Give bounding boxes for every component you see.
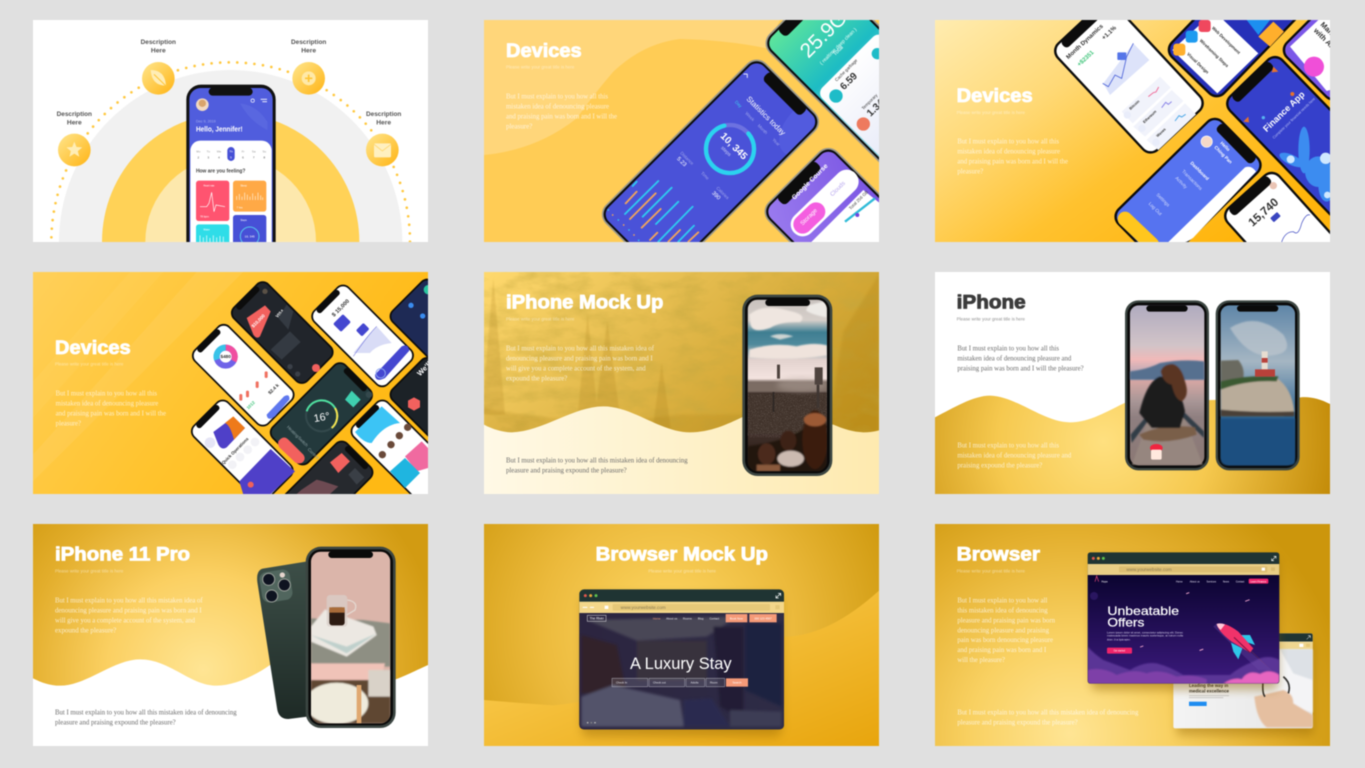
heading: Browser Mock Up <box>596 545 768 566</box>
body text: But I must explain to you how all this mistaken idea of <box>55 596 203 604</box>
phone: google course: Storage <box>800 208 819 227</box>
phone: Hello Jennifer app: 8 <box>263 155 265 159</box>
body text: mistaken idea of denouncing pleasure <box>957 148 1060 156</box>
phone: Hello Jennifer app: 78 bpm <box>200 215 210 219</box>
heading: Devices <box>506 41 582 62</box>
browser window: hotel: Home <box>653 616 661 620</box>
body text: But I must explain to you how all <box>957 597 1047 605</box>
browser window: medical: Leading the way in <box>1189 683 1228 688</box>
body text: pleasure? <box>957 168 983 176</box>
phone: Hello Jennifer app: 4 <box>218 155 220 159</box>
phone: task list: Visual Design <box>1186 51 1210 75</box>
phone: statistics today: 5.23 <box>675 156 687 168</box>
body text: mistaken idea of denouncing pleasure <box>506 102 609 110</box>
heading: Devices <box>957 86 1033 107</box>
subtitle: Please write your great title is here <box>55 569 124 574</box>
lower body text: But I must explain to you how all this <box>957 441 1059 449</box>
phone: 15,740 chart: 15,740 <box>1246 196 1281 229</box>
phone: Hello Jennifer app: Heart rate <box>203 184 215 187</box>
phone: dark map <box>267 437 377 547</box>
phone: Hello Jennifer app: Hello, Jennifer! <box>196 127 243 134</box>
phone: profile menu: Activity <box>1174 176 1189 190</box>
subtitle: Please write your great title is here <box>506 317 575 322</box>
heading: iPhone 11 Pro <box>55 545 190 566</box>
phone: statistics today: steps <box>719 145 732 158</box>
panel: devices dark and light app grid <box>32 271 429 495</box>
lower body text: But I must explain to you how all this mistaken idea of denouncing <box>957 708 1139 716</box>
panel: iPhone two photos <box>934 272 1331 495</box>
background blob <box>484 20 780 155</box>
phone: Hello Jennifer app: Steps <box>240 219 247 222</box>
browser window: unbeatable offers: Offers <box>1107 616 1144 630</box>
browser window: unbeatable offers: malesuada lorem maximus mauris scelerisque, at rutrum nulla <box>1107 635 1184 638</box>
body text <box>56 390 166 428</box>
browser window: unbeatable offers: www.yourwebsite.com <box>1126 567 1172 572</box>
heading: Browser <box>957 545 1041 566</box>
phone: Hello Jennifer app: Sleep <box>240 184 247 187</box>
browser window: hotel <box>579 589 784 737</box>
phone: donut chart: $2.4 k <box>267 382 280 395</box>
phone: Hello Jennifer app: 7 <box>253 155 255 159</box>
browser window: unbeatable offers: Unbeatable <box>1107 604 1179 618</box>
phone: Hello Jennifer app <box>186 85 276 258</box>
browser window: hotel: Adults <box>691 681 699 685</box>
labels: description: Here <box>67 119 82 126</box>
phone: google course: Total 256 GB <box>848 189 869 211</box>
phone: storage 25.9GB: 6.59 <box>838 71 860 92</box>
hotel room photo <box>579 613 784 729</box>
body text: But I must explain to you how all this <box>506 92 608 100</box>
dotted arc <box>51 62 410 421</box>
panel: phone with description icons <box>32 20 428 243</box>
subtitle: Please write your great title is here <box>648 569 716 574</box>
phone: profile menu: Transactions <box>1181 169 1204 192</box>
phone: google course <box>759 142 951 334</box>
phone: statistics today: Day <box>734 100 744 109</box>
phone: profile menu: Dashboard <box>1189 161 1210 181</box>
phone: storage 25.9GB <box>760 0 994 208</box>
browser window: unbeatable offers: Get started <box>1114 650 1126 653</box>
lower body text <box>957 708 1139 726</box>
phone: task list: Web Development <box>1211 25 1242 55</box>
browser window: hotel: Room <box>710 681 718 685</box>
labels: description: Description <box>141 39 176 46</box>
phone: statistics today: Week <box>744 111 756 123</box>
browser window: hotel: Rooms <box>683 616 692 620</box>
lower body text: pleasure and praising expound the pleasure? <box>957 718 1078 726</box>
phone: Hello Jennifer app: Th <box>229 149 233 153</box>
browser window: hotel: Check out <box>653 681 666 685</box>
body text: But I must explain to you how all this <box>957 138 1059 146</box>
phone: google course: Google Course <box>791 163 830 201</box>
lower body text: pleasure and praising expound the pleasure? <box>506 466 627 474</box>
body text: expound the pleasure? <box>55 626 116 634</box>
phone: statistics today: Distance <box>679 151 695 166</box>
phone: concert photo <box>742 295 832 476</box>
body text: praising pain was born and I will the pleasure? <box>957 365 1084 373</box>
body text: will give you a complete account of the system, and <box>55 616 195 624</box>
phone: dark credit card: VISA <box>275 307 286 319</box>
phone: dark with coral hexagon <box>386 353 502 469</box>
phone: Hello Jennifer app: 7 hrs <box>237 205 243 209</box>
body text: pleasure and praising pain was born <box>957 616 1055 624</box>
gold wave <box>935 396 1330 494</box>
browser window: unbeatable offers: dictum. Ut ac ligula sapien. <box>1107 638 1131 641</box>
phone: statistics today: Time <box>700 171 711 181</box>
browser window: hotel: 000 123 4567 <box>754 616 772 620</box>
subtitle: Please write your great title is here <box>957 110 1025 115</box>
body text: denouncing pleasure and praising <box>957 626 1049 634</box>
body text: But I must explain to you how all this mistaken idea of <box>506 344 655 352</box>
body text: will the pleasure? <box>957 656 1005 664</box>
phone: storage 25.9GB: Temporary <box>861 92 879 111</box>
phone: statistics today <box>596 54 825 282</box>
browser window: hotel: Book Now <box>730 616 744 620</box>
phone: profile menu: Settings <box>1155 192 1171 208</box>
phone: profile menu: Log Out <box>1148 201 1163 217</box>
body text: this mistaken idea of denouncing <box>957 607 1048 615</box>
body text: pain was born denouncing pleasure <box>957 636 1053 644</box>
body text: mistaken idea of denouncing pleasure and <box>957 355 1072 363</box>
phone: Hello Jennifer app: Su <box>262 149 266 153</box>
labels: description: Description <box>291 39 326 46</box>
body text: mistaken idea of denouncing pleasure <box>56 400 158 408</box>
phone: purple wallet: Quick Operations <box>221 436 250 465</box>
browser window: hotel: Contact <box>709 616 719 620</box>
lower lighter wave <box>484 591 879 746</box>
phone: storage 25.9GB: ( realtime deep clean ) <box>819 27 858 66</box>
body text: pleasure? <box>56 420 81 428</box>
phone: navy dashboard <box>386 275 502 391</box>
panel: devices with rotated phones <box>483 19 880 243</box>
phone: month dynamics: +1.1% <box>1101 25 1118 41</box>
browser window: unbeatable offers: Learn Finance <box>1250 580 1267 583</box>
body text: and praising pain was born and I <box>957 646 1047 654</box>
phone: Hello Jennifer app: Dec 9, 2019 <box>196 120 216 124</box>
panel: iPhone mock up <box>483 271 880 494</box>
lower body text <box>506 456 688 474</box>
labels: description: Description <box>366 111 401 118</box>
phone: month dynamics: Bitcoin <box>1129 99 1140 111</box>
lower body text: But I must explain to you how all this mistaken idea of denouncing <box>506 456 688 464</box>
labels: description: Description <box>57 111 92 118</box>
subtitle: Please write your great title is here <box>957 569 1025 574</box>
doctor photo <box>1254 649 1313 727</box>
phone: dark gauge: Switch <box>297 435 310 448</box>
phone: finance app: Complete your financial needs here <box>1272 97 1316 140</box>
phone: month dynamics: Ethereum <box>1142 109 1158 124</box>
body text <box>957 345 1084 373</box>
phone: task list <box>1163 0 1347 102</box>
phone: Hello Jennifer app: Tu <box>207 149 210 153</box>
cream wave <box>484 406 879 494</box>
phone: statistics today: 390 <box>710 191 721 201</box>
phone: statistics today: 10, 345 <box>718 131 749 163</box>
phone: statistics today: Statistics today <box>745 94 787 137</box>
browser window: medical: medical excellence <box>1189 688 1229 693</box>
phone: profile menu: Ching Pan <box>1213 145 1233 165</box>
body text: expound the pleasure? <box>506 374 567 382</box>
subtitle: Please write your great title is here <box>506 65 575 70</box>
labels: description: Here <box>376 119 391 126</box>
phone: $15,000 balance <box>308 281 418 391</box>
phone: finance app <box>1221 51 1365 238</box>
phone: sky travel app <box>347 396 457 506</box>
lower body text: But I must explain to you how all this mistaken idea of denouncing <box>55 708 237 716</box>
body text: But I must explain to you how all this <box>56 390 157 398</box>
body text <box>55 596 203 634</box>
subtitle: Please write your great title is here <box>957 317 1025 322</box>
phone: front with coffee photo <box>305 547 396 728</box>
lower body text: praising expound the pleasure? <box>957 461 1042 469</box>
browser window: unbeatable offers: News <box>1223 580 1230 583</box>
lower body text: pleasure and praising expound the pleasure? <box>55 718 176 726</box>
lower body text: mistaken idea of denouncing pleasure and <box>957 451 1072 459</box>
phone: google course: Clouds <box>830 181 847 198</box>
phone: Hello Jennifer app: Fr <box>242 149 244 153</box>
concentric half circles <box>59 70 402 413</box>
body text: denouncing pleasure and praising pain was born and I <box>506 354 653 362</box>
body text: But I must explain to you how all this <box>957 345 1059 353</box>
panel: browser mock up <box>483 523 880 747</box>
phone: statistics today: Calories <box>715 186 730 200</box>
phone: month dynamics: Waves <box>1156 127 1167 138</box>
browser window: unbeatable offers: Hope <box>1101 579 1108 583</box>
labels: description <box>57 39 401 126</box>
browser window: hotel: Check In <box>616 681 628 685</box>
phone: Hello Jennifer app: How are you feeling? <box>196 169 245 175</box>
body text <box>957 138 1068 176</box>
phone: Hello Jennifer app: 10, 345 <box>245 235 255 239</box>
rocket <box>1214 622 1265 664</box>
labels: description: Here <box>151 47 166 54</box>
phone: lighthouse photo <box>1216 300 1300 470</box>
browser window: unbeatable offers <box>1088 552 1279 690</box>
phone: back of iPhone with cameras <box>257 561 307 719</box>
phone: statistics today: Year <box>771 137 781 147</box>
browser window: hotel: www.yourwebsite.com <box>621 605 666 611</box>
panel: browser two windows <box>934 523 1331 747</box>
phone: Hello Jennifer app: 5 <box>230 155 232 159</box>
icon: envelope <box>366 134 399 166</box>
body text: will give you a complete account of the system, and <box>506 364 646 372</box>
phone: storage 25.9GB: Cache garbage <box>834 57 859 82</box>
phone: donut chart: 1012 <box>246 400 256 410</box>
body text <box>506 344 655 382</box>
heading: Devices <box>55 338 131 359</box>
browser window: hotel: About us <box>666 616 678 620</box>
phone: profile menu <box>1110 113 1266 269</box>
phone: manage app <box>1278 0 1365 105</box>
phone: dark gauge: Heating <box>286 425 300 439</box>
phone: statistics today: Month <box>757 123 769 136</box>
phone: dark gauge: 16° <box>313 410 331 425</box>
body text: and praising pain was born and I will the <box>957 158 1068 166</box>
phone: month dynamics: +$2351 <box>1077 50 1096 68</box>
gold top with wave <box>33 524 428 686</box>
browser window: unbeatable offers: Home <box>1176 580 1183 583</box>
phone: donut chart <box>188 320 298 430</box>
browser window: hotel: The River <box>589 617 605 621</box>
heading: iPhone <box>957 293 1026 314</box>
phone: Hello Jennifer app: Mo <box>196 149 201 153</box>
subtitle: Please write your great title is here <box>55 362 124 367</box>
phone: dark gauge: Control <box>307 447 320 460</box>
phone: 15,740 chart <box>1219 167 1365 322</box>
browser window: hotel: A Luxury Stay <box>630 655 733 673</box>
lower body text <box>957 441 1072 469</box>
background mountains and pines <box>482 272 879 445</box>
browser window: unbeatable offers: Services <box>1207 580 1217 583</box>
phone: Hello Jennifer app: 3 <box>207 155 209 159</box>
browser window: unbeatable offers: About us <box>1190 580 1200 583</box>
phone: woman in boat photo <box>1125 300 1209 470</box>
browser window: medical <box>1173 633 1313 735</box>
icon: leaf <box>142 62 175 95</box>
phone: dark credit card: $10,000 <box>251 313 266 329</box>
phone: donut chart: $480 <box>220 354 231 359</box>
phone: Hello Jennifer app: Sa <box>252 149 256 153</box>
browser window: unbeatable offers: Lorem ipsum dolor sit amet, consectetur adipiscing elit. Donec <box>1107 631 1184 634</box>
body text <box>957 597 1055 664</box>
body text: and praising pain was born and I will the <box>56 410 166 418</box>
body text: denouncing pleasure and praising pain was born and I <box>55 606 202 614</box>
phone: profile menu: Hello <box>1219 141 1231 152</box>
phone: storage 25.9GB: Total <box>832 45 845 57</box>
phone: finance app: Finance App <box>1261 89 1307 134</box>
panel: iPhone 11 Pro <box>32 523 429 746</box>
lower body text <box>55 708 237 726</box>
phone: Hello Jennifer app: Water <box>203 228 210 231</box>
browser window: unbeatable offers: Contact <box>1236 580 1245 583</box>
phone: month dynamics <box>1049 0 1209 158</box>
phone: $15,000 balance: $ 15,000 <box>331 299 351 318</box>
body text: and praising pain was born and I will the <box>506 112 617 120</box>
labels: description: Here <box>301 47 316 54</box>
phone: Hello Jennifer app: We <box>217 149 222 153</box>
browser window: hotel: Search <box>733 681 742 685</box>
body text <box>506 92 617 130</box>
browser window: hotel: Blog <box>698 616 704 620</box>
phone: dark credit card <box>227 278 337 387</box>
phone: dark gauge <box>266 359 377 469</box>
phone: purple wallet <box>187 396 297 506</box>
heading: iPhone Mock Up <box>506 293 663 314</box>
phone: Hello Jennifer app: 2 <box>197 155 199 159</box>
phone: Hello Jennifer app: 6 <box>242 155 244 159</box>
panel: devices finance apps grid <box>934 19 1331 243</box>
icon: star <box>58 134 91 166</box>
clouds <box>1088 647 1279 684</box>
body text: pleasure? <box>506 122 532 130</box>
phone: month dynamics: Month Dynamics <box>1066 23 1105 61</box>
icon: plus <box>292 62 325 95</box>
phone: task list: Wireframing Steps <box>1199 38 1230 69</box>
